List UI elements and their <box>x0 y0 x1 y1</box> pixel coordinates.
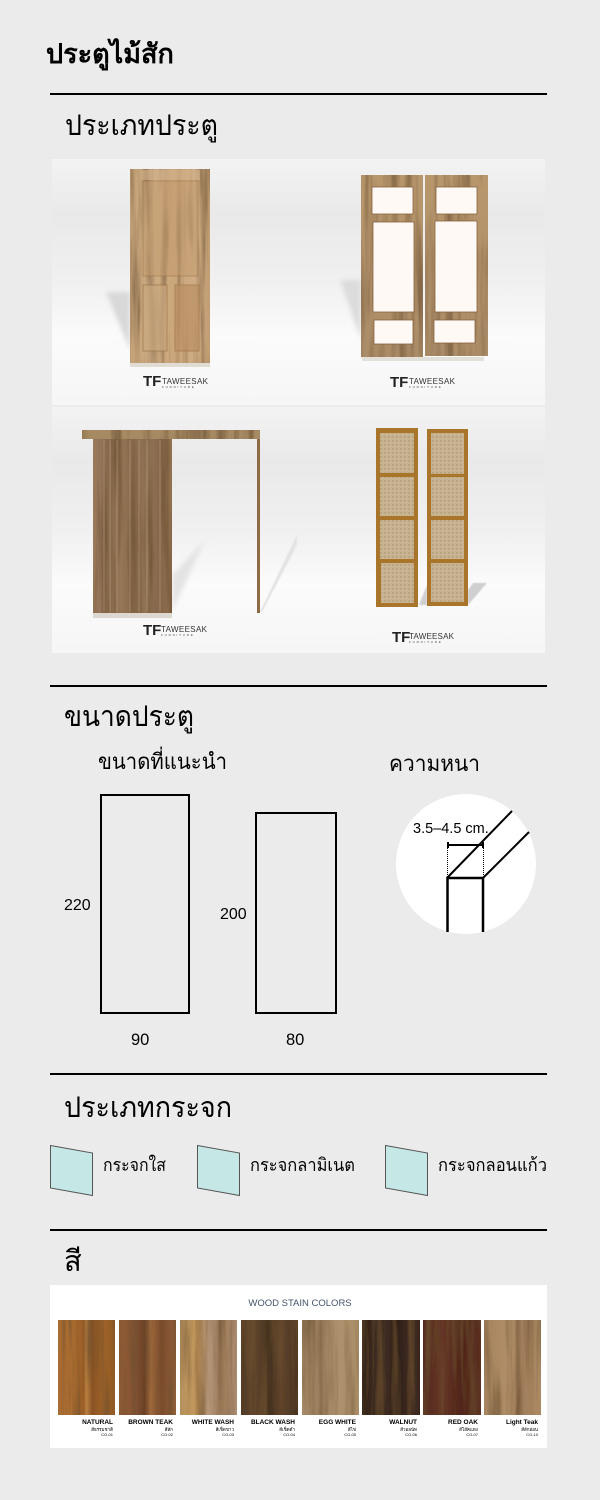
logo <box>143 373 209 390</box>
diagram: door thickness: 3.5–4.5 cm. <box>413 821 489 837</box>
swatch: natural: CO-01 <box>101 1432 114 1437</box>
glass type: laminated: กระจกลามิเนต <box>250 1155 355 1175</box>
swatch: natural: NATURAL <box>82 1419 113 1426</box>
diagram: door thickness <box>396 794 536 934</box>
logo: FURNITURE <box>162 385 196 389</box>
glass type: wave: กระจกลอนแก้ว <box>438 1155 547 1175</box>
swatch: red oak: CO-07 <box>466 1432 479 1437</box>
swatch: black wash <box>241 1320 298 1437</box>
heading: glass types: ประเภทกระจก <box>64 1092 232 1124</box>
logo <box>143 622 208 639</box>
swatch: light teak: CO-10 <box>526 1432 539 1437</box>
photo: sliding door <box>52 407 298 653</box>
swatch: walnut: สีวอลนัท <box>400 1427 417 1432</box>
logo: TAWEESAK <box>162 377 209 386</box>
diagram: door 80 x 200: 200 <box>220 906 247 923</box>
heading: door types: ประเภทประตู <box>65 110 218 143</box>
panel: wood stain colors <box>50 1285 547 1448</box>
logo: TF <box>390 374 408 391</box>
logo: TAWEESAK <box>409 632 455 641</box>
swatch: black wash: สีเช็ดดำ <box>279 1425 295 1432</box>
swatch: red oak: สีโอ๊คแดง <box>459 1426 478 1432</box>
swatch: red oak: RED OAK <box>448 1419 478 1426</box>
panel title: WOOD STAIN COLORS <box>248 1298 352 1309</box>
swatch: white wash: สีเช็ดขาว <box>215 1425 234 1432</box>
heading: door size: ขนาดประตู <box>64 701 194 734</box>
swatch: walnut <box>362 1320 420 1437</box>
swatch: light teak: สีสักอ่อน <box>521 1427 538 1432</box>
swatch: egg white: สีไข่ <box>348 1427 356 1432</box>
swatch: brown teak: CO-02 <box>161 1432 174 1437</box>
logo: FURNITURE <box>409 385 443 389</box>
panel: door photo grid <box>52 159 545 653</box>
glass type: clear: กระจกใส <box>103 1154 166 1175</box>
subheading: recommended size: ขนาดที่แนะนำ <box>98 746 227 774</box>
swatch: egg white: CO-05 <box>344 1432 357 1437</box>
swatch: white wash: WHITE WASH <box>192 1419 234 1426</box>
glass type: laminated <box>198 1146 355 1196</box>
swatch: light teak: Light Teak <box>506 1419 538 1426</box>
logo: TF <box>392 629 410 646</box>
logo: FURNITURE <box>409 640 443 644</box>
photo: panelled teak door <box>52 159 298 405</box>
logo <box>390 374 456 391</box>
logo: TF <box>143 373 161 390</box>
swatch: egg white: EGG WHITE <box>319 1419 357 1426</box>
photo: rattan doors <box>298 407 545 653</box>
logo: TF <box>143 622 161 639</box>
swatch: red oak <box>423 1320 481 1437</box>
swatch: natural: สีธรรมชาติ <box>91 1427 113 1432</box>
swatch: brown teak <box>119 1320 176 1437</box>
heading: colors: สี <box>64 1246 82 1278</box>
diagram: door 90 x 220 <box>64 795 189 1049</box>
swatch: light teak <box>484 1320 541 1437</box>
swatch: black wash: CO-04 <box>283 1432 296 1437</box>
subheading: thickness: ความหนา <box>389 751 480 776</box>
swatch: egg white <box>302 1320 359 1437</box>
swatch: brown teak: BROWN TEAK <box>128 1419 173 1426</box>
swatch: white wash <box>180 1320 237 1437</box>
swatch: white wash: CO-03 <box>222 1432 235 1437</box>
swatch: natural <box>58 1320 115 1437</box>
diagram: door 80 x 200 <box>220 813 336 1049</box>
logo: TAWEESAK <box>161 625 208 634</box>
glass type: wave <box>386 1146 547 1196</box>
swatch: walnut: WALNUT <box>389 1419 417 1426</box>
photo: double glazed doors <box>298 159 545 405</box>
swatch: brown teak: สีสัก <box>165 1427 173 1432</box>
diagram: door 90 x 220: 220 <box>64 897 91 914</box>
logo: FURNITURE <box>161 633 195 637</box>
swatch: walnut: CO-06 <box>405 1432 418 1437</box>
glass type: clear <box>50 1146 166 1196</box>
diagram: door 80 x 200: 80 <box>286 1031 304 1049</box>
logo: TAWEESAK <box>409 377 456 386</box>
logo <box>392 629 455 646</box>
diagram: door 90 x 220: 90 <box>131 1031 149 1049</box>
title: ประตูไม้สัก <box>46 38 174 71</box>
swatch: black wash: BLACK WASH <box>251 1419 295 1426</box>
